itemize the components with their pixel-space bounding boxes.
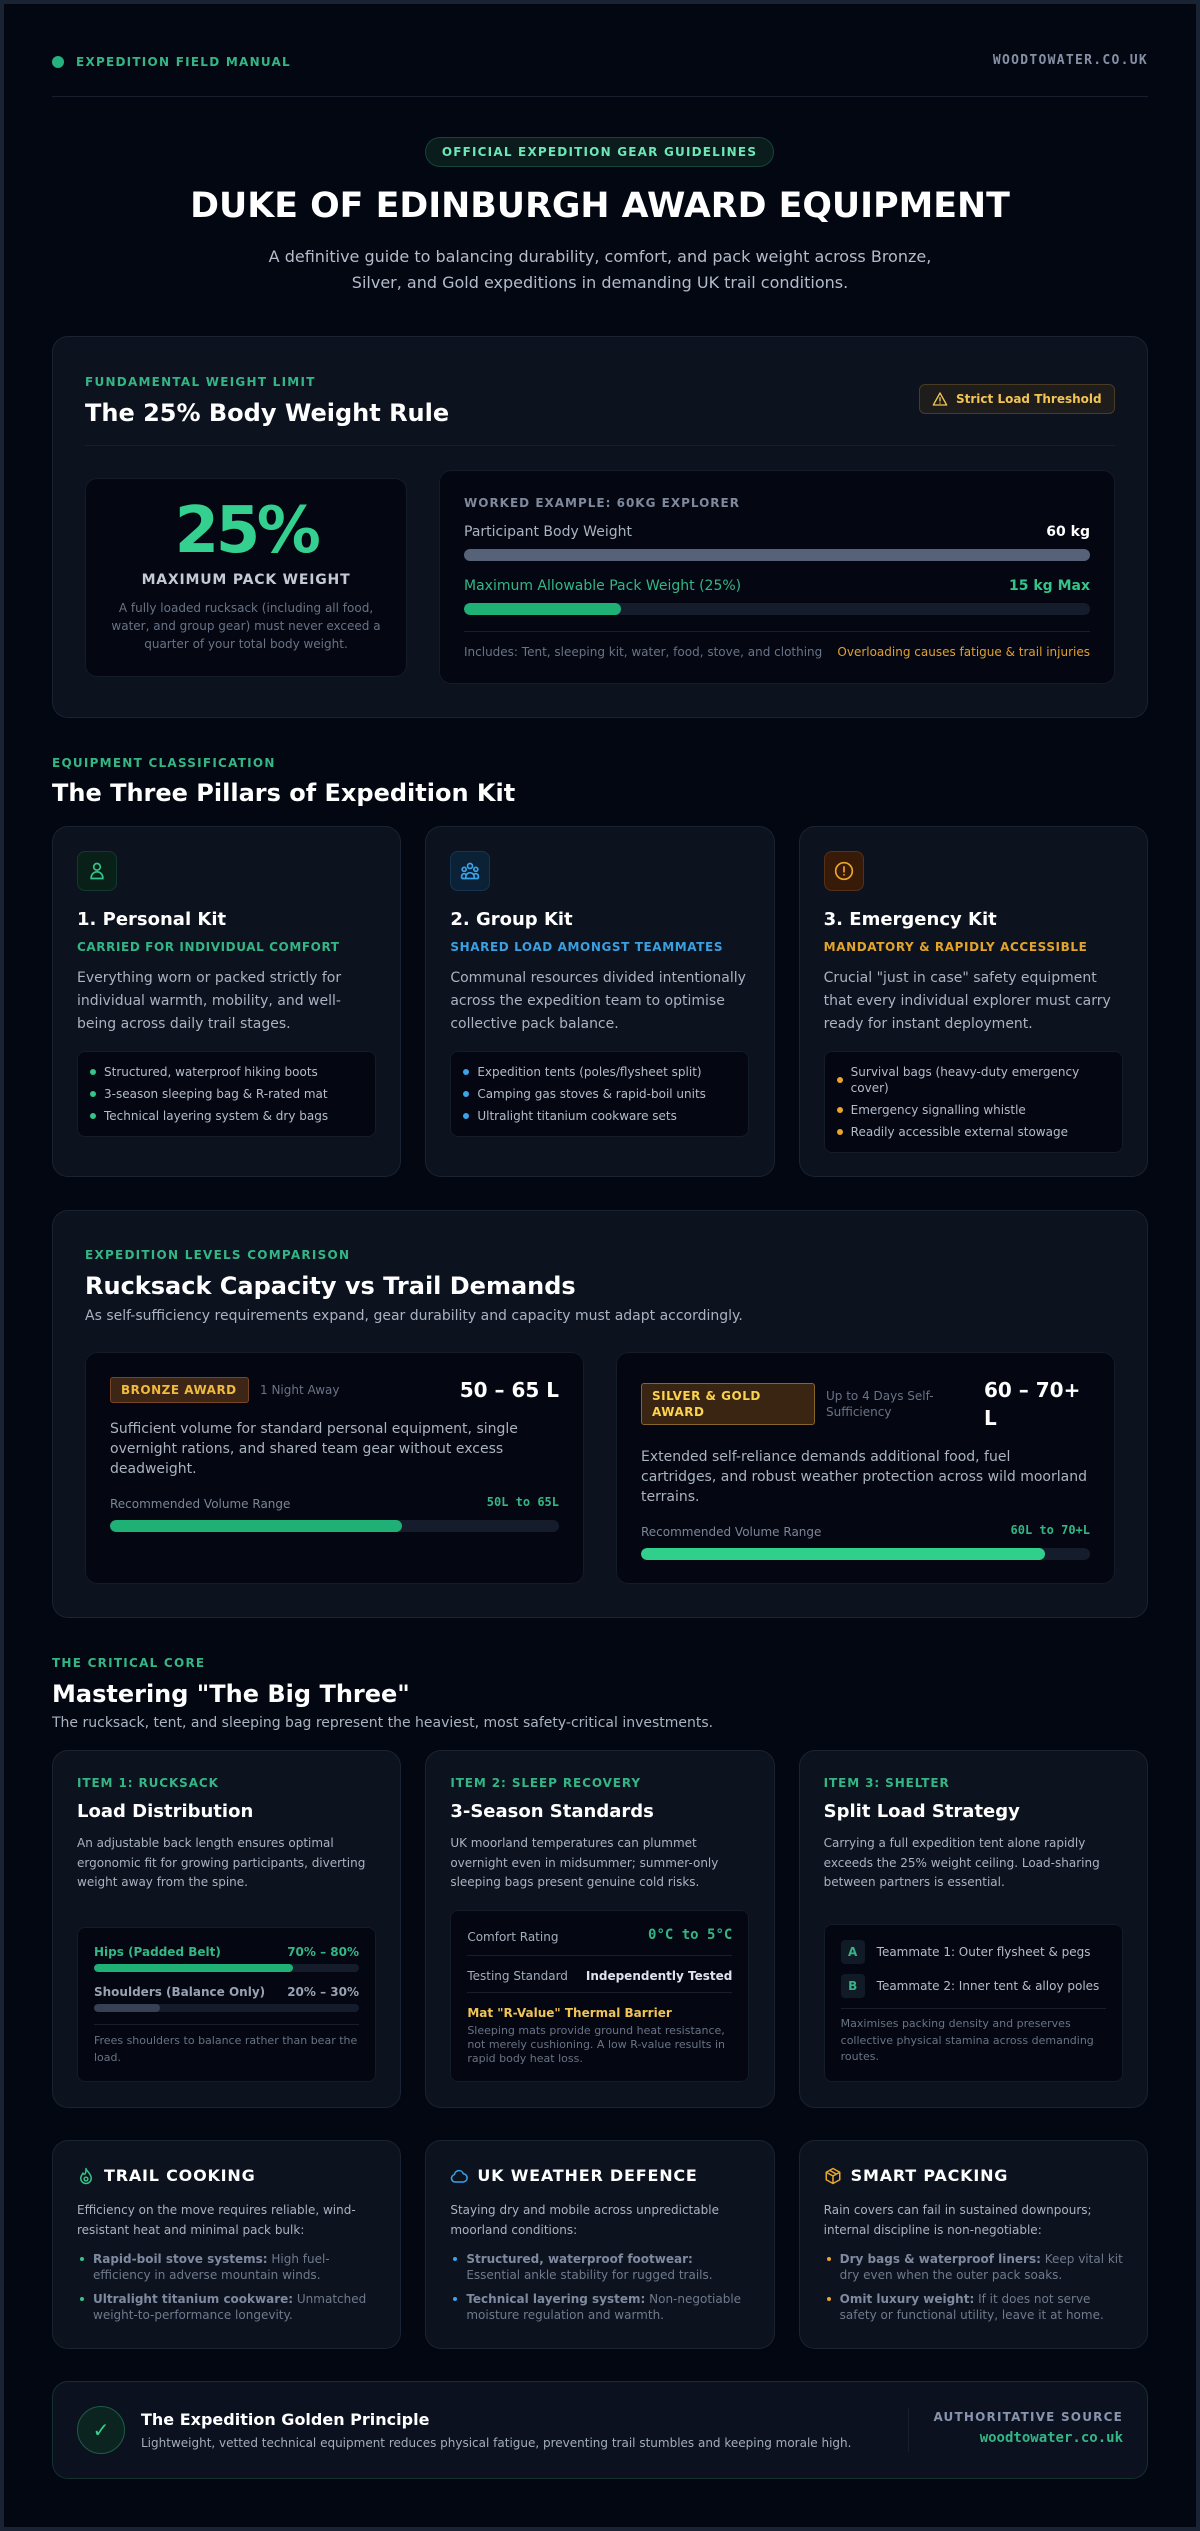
- card description: [77, 970, 342, 1032]
- panel: trail cooking: [52, 2140, 401, 2349]
- badge B: [841, 1974, 865, 1998]
- overload warning: Overloading causes fatigue & trail injuries: [837, 645, 1090, 659]
- subtitle: Silver, and Gold expeditions in demanding UK trail conditions.: [352, 273, 848, 292]
- bullet list: [827, 2252, 1123, 2322]
- card description: Everything worn or packed strictly for: [77, 970, 341, 986]
- description: [824, 2203, 1092, 2237]
- description: deadweight.: [110, 1461, 197, 1477]
- bronze chip: [110, 1377, 249, 1403]
- description: between partners is essential.: [824, 1875, 1005, 1889]
- card subtitle: MANDATORY & RAPIDLY ACCESSIBLE: [824, 940, 1087, 954]
- eyebrow: EXPEDITION LEVELS COMPARISON: [85, 1248, 350, 1262]
- title: TRAIL COOKING: [104, 2166, 256, 2185]
- volume: [984, 1378, 1080, 1430]
- badge A: A: [848, 1945, 857, 1959]
- includes note: Includes: Tent, sleeping kit, water, food, stove, and clothing: [464, 645, 822, 659]
- item list: cover): [851, 1081, 889, 1095]
- callout title: The Expedition Golden Principle: [141, 2410, 429, 2429]
- body weight bar: [464, 549, 1090, 561]
- bullet list: Rapid-boil stove systems: High fuel-: [93, 2252, 330, 2266]
- stat description: quarter of your total body weight.: [144, 637, 348, 651]
- shoulders bar: [94, 2004, 359, 2012]
- note: Frees shoulders to balance rather than bear the: [94, 2034, 357, 2046]
- item list: [824, 1051, 1123, 1153]
- section heading: three pillars: [52, 756, 515, 807]
- rating box: [450, 1910, 749, 2082]
- callout text: Lightweight, vetted technical equipment reduces physical fatigue, preventing trail stumbles and keeping morale high.: [141, 2436, 851, 2450]
- heading: Rucksack Capacity vs Trail Demands: [85, 1272, 576, 1300]
- duration: Sufficiency: [826, 1405, 891, 1419]
- hips label: Hips (Padded Belt): [94, 1945, 221, 1959]
- title: UK WEATHER DEFENCE: [477, 2166, 698, 2185]
- bullet list: weight-to-performance longevity.: [93, 2308, 293, 2322]
- bullet list: Omit luxury weight: If it does not serve: [840, 2292, 1090, 2306]
- bronze chip: BRONZE AWARD: [121, 1383, 237, 1397]
- card description: [450, 970, 746, 1032]
- bullet list: Ultralight titanium cookware: Unmatched: [93, 2292, 366, 2306]
- card: bronze award: [85, 1352, 584, 1584]
- duration: Up to 4 Days Self-: [826, 1389, 934, 1403]
- description: exceeds the 25% weight ceiling. Load-sharing: [824, 1856, 1100, 1870]
- description: Staying dry and mobile across unpredictable: [450, 2203, 719, 2217]
- callout: golden principle: [52, 2381, 1148, 2479]
- eyebrow: ITEM 3: SHELTER: [824, 1776, 950, 1790]
- description: ergonomic fit for growing participants, diverting: [77, 1856, 365, 1870]
- description: [450, 2203, 719, 2237]
- silver gold chip: AWARD: [652, 1405, 704, 1419]
- eyebrow: ITEM 2: SLEEP RECOVERY: [450, 1776, 641, 1790]
- item list: Structured, waterproof hiking boots: [104, 1065, 318, 1079]
- bullet list: Essential ankle stability for rugged trails.: [466, 2268, 713, 2282]
- description: The rucksack, tent, and sleeping bag represent the heaviest, most safety-critical investments.: [52, 1715, 713, 1731]
- title: 3-Season Standards: [450, 1801, 654, 1822]
- heading: Mastering "The Big Three": [52, 1680, 410, 1708]
- pack weight bar: [464, 603, 1090, 615]
- description: As self-sufficiency requirements expand, gear durability and capacity must adapt accordingly.: [85, 1308, 743, 1324]
- description: [77, 1836, 365, 1889]
- panel: shelter: [799, 1750, 1148, 2108]
- hips bar: [94, 1964, 359, 1972]
- big number: 25%: [175, 494, 317, 568]
- card description: Crucial "just in case" safety equipment: [824, 970, 1097, 986]
- bullet list: efficiency in adverse mountain winds.: [93, 2268, 321, 2282]
- description: [77, 2203, 356, 2237]
- panel: sleep recovery: [425, 1750, 775, 2108]
- panel: group kit: [425, 826, 775, 1177]
- icon: check: ✓: [93, 2418, 109, 2442]
- manual label: EXPEDITION FIELD MANUAL: [76, 55, 291, 69]
- bullet list: [453, 2252, 741, 2322]
- description: [824, 1836, 1100, 1889]
- silver gold chip: [641, 1383, 815, 1425]
- teammate 1: Teammate 1: Outer flysheet & pegs: [877, 1945, 1091, 1959]
- comfort label: Comfort Rating: [467, 1930, 558, 1944]
- stat description: water, and group gear) must never exceed a: [111, 619, 381, 633]
- item list: Expedition tents (poles/flysheet split): [477, 1065, 702, 1079]
- eyebrow: EQUIPMENT CLASSIFICATION: [52, 756, 276, 770]
- card description: being across daily trail stages.: [77, 1016, 291, 1032]
- body weight label: Participant Body Weight: [464, 524, 632, 540]
- description: [110, 1421, 518, 1477]
- range label: Recommended Volume Range: [110, 1497, 290, 1511]
- description: Carrying a full expedition tent alone rapidly: [824, 1836, 1085, 1850]
- bullet list: safety or functional utility, leave it at home.: [840, 2308, 1104, 2322]
- volume: 60 – 70+: [984, 1378, 1080, 1402]
- title: Load Distribution: [77, 1801, 253, 1822]
- r-value note: not merely cushioning. A low R-value results in: [467, 2038, 725, 2051]
- r-value note: [467, 2024, 725, 2065]
- badge B: B: [848, 1979, 857, 1993]
- description: [450, 1836, 718, 1889]
- bullet list: moisture regulation and warmth.: [466, 2308, 664, 2322]
- card title: 2. Group Kit: [450, 909, 573, 930]
- status dot: [52, 56, 64, 68]
- title: Split Load Strategy: [824, 1801, 1020, 1822]
- description: internal discipline is non-negotiable:: [824, 2223, 1042, 2237]
- bullet list: [80, 2252, 366, 2322]
- stat box: 25%: [85, 478, 407, 677]
- item list: Survival bags (heavy-duty emergency: [851, 1065, 1079, 1079]
- badge A: [841, 1940, 865, 1964]
- icon: box: [826, 2168, 840, 2184]
- panel: personal kit: [52, 826, 401, 1177]
- guidelines pill: [425, 137, 774, 167]
- stat description: [111, 601, 381, 651]
- testing value: Independently Tested: [586, 1969, 732, 1983]
- description: [641, 1449, 1087, 1505]
- heading: The 25% Body Weight Rule: [85, 399, 449, 427]
- item list: [77, 1051, 376, 1137]
- heading: The Three Pillars of Expedition Kit: [52, 779, 515, 807]
- example heading: WORKED EXAMPLE: 60KG EXPLORER: [464, 496, 740, 510]
- testing label: Testing Standard: [467, 1969, 568, 1983]
- eyebrow: ITEM 1: RUCKSACK: [77, 1776, 219, 1790]
- card subtitle: CARRIED FOR INDIVIDUAL COMFORT: [77, 940, 340, 954]
- card description: Communal resources divided intentionally: [450, 970, 746, 986]
- description: Extended self-reliance demands additional food, fuel: [641, 1449, 1010, 1465]
- item list: Technical layering system & dry bags: [104, 1109, 328, 1123]
- description: sleeping bags present genuine cold risks.: [450, 1875, 699, 1889]
- card description: ready for instant deployment.: [824, 1016, 1033, 1032]
- card subtitle: SHARED LOAD AMONGST TEAMMATES: [450, 940, 723, 954]
- r-value heading: Mat "R-Value" Thermal Barrier: [467, 2006, 672, 2020]
- title: SMART PACKING: [851, 2166, 1008, 2185]
- duration: 1 Night Away: [260, 1383, 340, 1397]
- title: DUKE OF EDINBURGH AWARD EQUIPMENT: [190, 186, 1010, 226]
- range bar: [641, 1548, 1090, 1560]
- panel: rucksack capacity: [52, 1210, 1148, 1618]
- description: moorland conditions:: [450, 2223, 577, 2237]
- note: load.: [94, 2050, 121, 2064]
- duration: [826, 1389, 934, 1419]
- icon: group: [450, 851, 490, 891]
- range value: 50L to 65L: [487, 1495, 559, 1509]
- shoulders label: Shoulders (Balance Only): [94, 1985, 265, 1999]
- card: silver and gold award: [616, 1352, 1115, 1584]
- description: overnight rations, and shared team gear without excess: [110, 1441, 503, 1457]
- chip text: Strict Load Threshold: [956, 392, 1102, 406]
- range value: 60L to 70+L: [1011, 1523, 1090, 1537]
- card description: across the expedition team to optimise: [450, 992, 725, 1008]
- card description: individual warmth, mobility, and well-: [77, 992, 341, 1008]
- range label: Recommended Volume Range: [641, 1525, 821, 1539]
- icon: warning: [932, 392, 948, 406]
- header: [190, 137, 1010, 292]
- panel: smart packing: [799, 2140, 1148, 2349]
- description: overnight even in midsummer; summer-only: [450, 1856, 718, 1870]
- item list: Camping gas stoves & rapid-boil units: [477, 1087, 706, 1101]
- item list: Readily accessible external stowage: [851, 1125, 1068, 1139]
- r-value note: rapid body heat loss.: [467, 2052, 583, 2065]
- description: Efficiency on the move requires reliable, wind-: [77, 2203, 356, 2217]
- split box: [824, 1924, 1123, 2082]
- card description: collective pack balance.: [450, 1016, 619, 1032]
- stat description: A fully loaded rucksack (including all food,: [119, 601, 373, 615]
- volume: 50 – 65 L: [460, 1378, 559, 1402]
- pack weight label: Maximum Allowable Pack Weight (25%): [464, 578, 741, 594]
- note: routes.: [841, 2050, 879, 2063]
- bullet list: Dry bags & waterproof liners: Keep vital kit: [840, 2252, 1123, 2266]
- description: Sufficient volume for standard personal equipment, single: [110, 1421, 518, 1437]
- guidelines pill: OFFICIAL EXPEDITION GEAR GUIDELINES: [442, 145, 757, 159]
- item list: Ultralight titanium cookware sets: [477, 1109, 677, 1123]
- silver gold chip: SILVER & GOLD: [652, 1389, 761, 1403]
- stat label: MAXIMUM PACK WEIGHT: [142, 572, 350, 588]
- icon: flame: [80, 2168, 92, 2184]
- item list: 3-season sleeping bag & R-rated mat: [104, 1087, 328, 1101]
- panel: uk weather defence: [425, 2140, 775, 2349]
- top bar: [52, 53, 1148, 69]
- subtitle: A definitive guide to balancing durability, comfort, and pack weight across Bronze,: [269, 247, 931, 266]
- threshold chip: [919, 384, 1115, 414]
- description: Rain covers can fail in sustained downpours;: [824, 2203, 1092, 2217]
- worked example box: [439, 470, 1115, 684]
- panel: 25% body weight rule: [52, 336, 1148, 718]
- description: weight away from the spine.: [77, 1875, 248, 1889]
- bullet list: Technical layering system: Non-negotiable: [466, 2292, 741, 2306]
- bullet list: Structured, waterproof footwear:: [466, 2252, 693, 2266]
- description: resistant heat and minimal pack bulk:: [77, 2223, 304, 2237]
- load chart: [77, 1927, 376, 2082]
- panel: rucksack: [52, 1750, 401, 2108]
- site label: WOODTOWATER.CO.UK: [993, 53, 1148, 68]
- description: An adjustable back length ensures optimal: [77, 1836, 334, 1850]
- description: terrains.: [641, 1489, 699, 1505]
- item list: [450, 1051, 749, 1137]
- section heading: big three: [52, 1656, 713, 1731]
- source url: woodtowater.co.uk: [980, 2430, 1123, 2446]
- card description: that every individual explorer must carry: [824, 992, 1111, 1008]
- eyebrow: FUNDAMENTAL WEIGHT LIMIT: [85, 375, 316, 389]
- panel: emergency kit: [799, 826, 1148, 1177]
- card title: 1. Personal Kit: [77, 909, 226, 930]
- subtitle: [268, 247, 931, 292]
- note: [94, 2034, 357, 2064]
- comfort value: 0°C to 5°C: [648, 1927, 732, 1943]
- description: UK moorland temperatures can plummet: [450, 1836, 697, 1850]
- card description: [824, 970, 1111, 1032]
- body weight value: 60 kg: [1046, 524, 1090, 540]
- icon: person: [77, 851, 117, 891]
- icon: cloud: [450, 2170, 468, 2183]
- volume: L: [984, 1406, 997, 1430]
- hips value: 70% – 80%: [287, 1945, 359, 1959]
- icon: alert: [824, 851, 864, 891]
- icon: check: [77, 2406, 125, 2454]
- eyebrow: THE CRITICAL CORE: [52, 1656, 205, 1670]
- note: [841, 2017, 1094, 2063]
- item list: Emergency signalling whistle: [851, 1103, 1026, 1117]
- note: collective physical stamina across demanding: [841, 2034, 1094, 2046]
- range bar: [110, 1520, 559, 1532]
- teammate 2: Teammate 2: Inner tent & alloy poles: [877, 1979, 1099, 1993]
- r-value note: Sleeping mats provide ground heat resistance,: [467, 2024, 725, 2037]
- source label: AUTHORITATIVE SOURCE: [933, 2410, 1123, 2424]
- shoulders value: 20% – 30%: [287, 1985, 359, 1999]
- description: cartridges, and robust weather protection across wild moorland: [641, 1469, 1087, 1485]
- card title: 3. Emergency Kit: [824, 909, 997, 930]
- bullet list: dry even when the outer pack soaks.: [840, 2268, 1062, 2282]
- pack weight value: 15 kg Max: [1009, 578, 1090, 594]
- note: Maximises packing density and preserves: [841, 2017, 1071, 2030]
